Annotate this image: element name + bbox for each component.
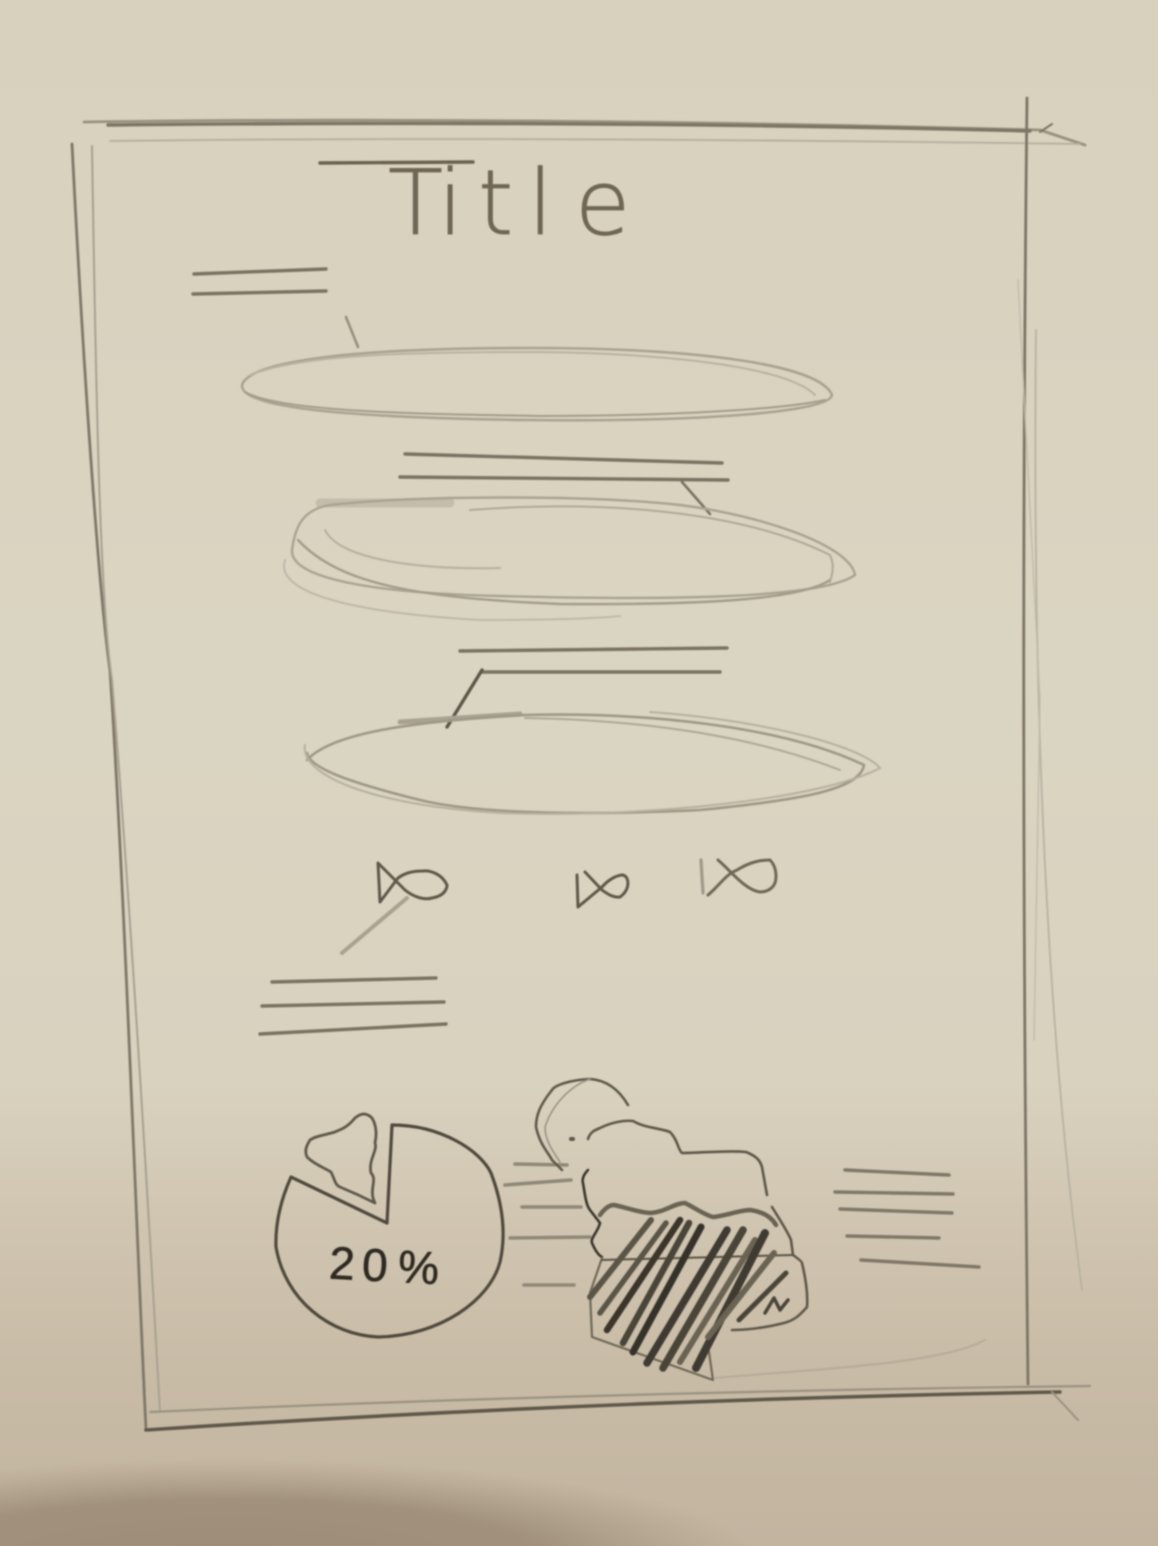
faint map base stroke <box>715 1340 985 1378</box>
pie chart <box>276 1114 503 1337</box>
ellipse 3 <box>305 712 880 814</box>
percentage label: 20% <box>328 1237 440 1294</box>
ellipse 2 <box>284 498 855 620</box>
icon: fish 2 <box>577 872 628 907</box>
callout text 2 <box>400 454 728 514</box>
callout text 3 <box>447 648 727 727</box>
map hatched region <box>590 1203 793 1380</box>
pie slice <box>306 1114 376 1203</box>
icon: fish 1 with pointer <box>342 863 447 953</box>
ellipse 1 <box>242 348 832 420</box>
page frame <box>72 98 1090 1430</box>
icon: fish 3 <box>701 860 776 895</box>
right legend lines <box>835 1170 979 1267</box>
title: Title <box>388 151 630 256</box>
map outline <box>536 1079 807 1330</box>
left legend lines <box>505 1164 590 1285</box>
text lines under fish <box>260 978 446 1034</box>
callout text 1 <box>193 269 358 347</box>
